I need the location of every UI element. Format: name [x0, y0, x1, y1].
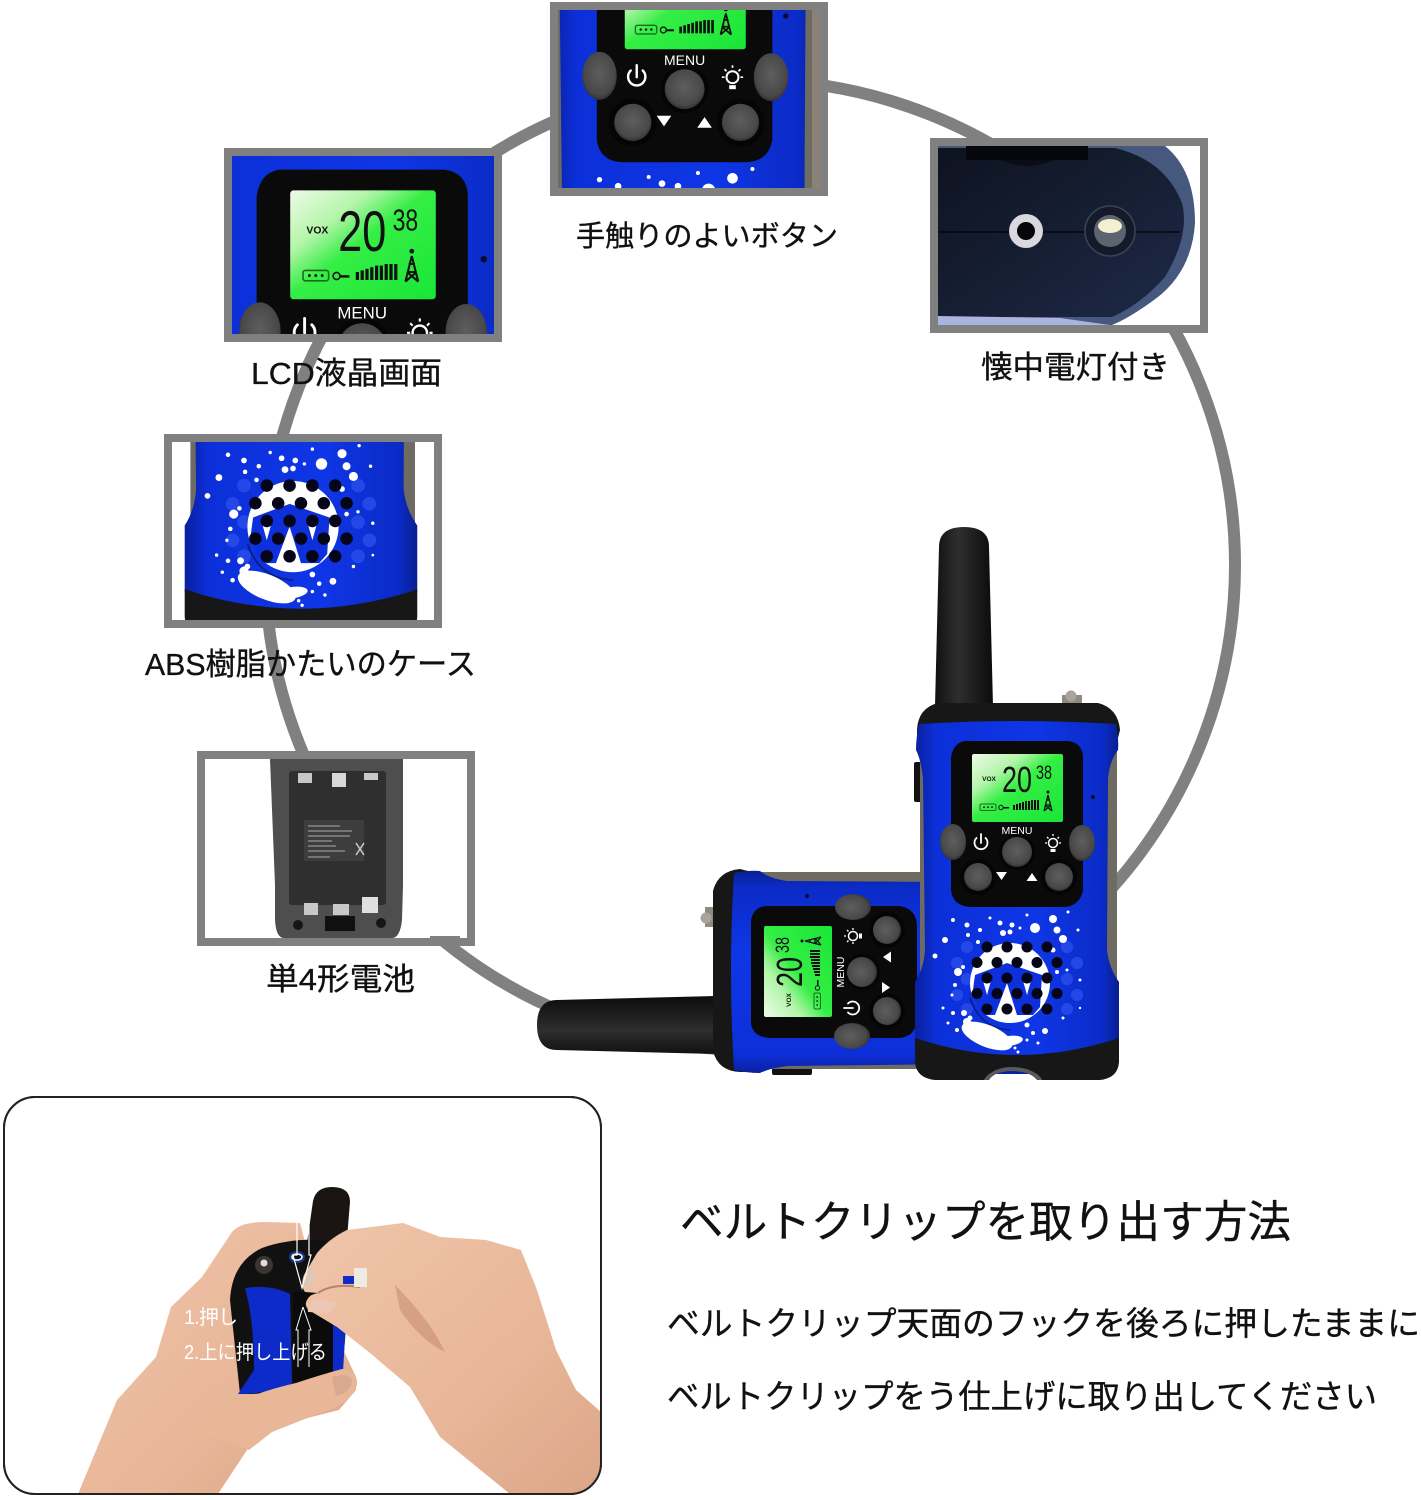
icon: walkie antenna	[308, 1187, 350, 1243]
icon: walkie held in hand	[230, 1240, 350, 1394]
connecting ring	[265, 80, 1235, 1050]
product photo: walkie lying on side: MENU	[835, 956, 847, 988]
product photo: walkie standing: MENU	[1002, 825, 1032, 837]
product photo: walkie lying on side	[537, 869, 1090, 1075]
label: flashlight: 懐中電灯付き	[981, 350, 1170, 385]
panel: LCD close-up	[224, 148, 502, 342]
panel: LCD close-up: MENU	[337, 303, 387, 322]
product photo: walkie standing: 20	[1002, 759, 1032, 800]
product photo: walkie lying on side: 20	[769, 957, 810, 987]
text block: instruction line 1: ベルトクリップ天面のフックを後ろに押したままに	[667, 1305, 1420, 1342]
icon: right hand	[302, 1223, 601, 1494]
product photo: walkie lying on side: 38	[773, 937, 794, 953]
panel: flashlight close-up	[934, 142, 1204, 329]
label: step 2: 2.上に押し上げる	[184, 1341, 327, 1364]
icon: push arrows	[293, 1220, 311, 1367]
product photo: walkie standing: 38	[1036, 763, 1052, 784]
panel: belt clip hand photo	[4, 1097, 601, 1494]
panel: buttons close-up: MENU	[664, 52, 705, 68]
panel: LCD close-up: 20	[338, 200, 386, 264]
product photo: walkie lying on side: VOX	[786, 992, 793, 1007]
label: ABS case: ABS樹脂かたいのケース	[145, 647, 476, 682]
label: step 1: 1.押し	[184, 1306, 238, 1329]
product photo: walkie standing: VOX	[982, 776, 997, 783]
product photo: walkie standing	[914, 527, 1120, 1080]
icon: left thumb	[248, 1369, 358, 1450]
icon: left hand	[78, 1222, 356, 1494]
panel: LCD close-up: 38	[393, 203, 418, 237]
panel: battery compartment close-up	[201, 755, 471, 942]
panel: ABS case close-up	[164, 434, 442, 628]
label: buttons: 手触りのよいボタン	[576, 220, 838, 253]
label: battery: 単4形電池	[266, 962, 415, 997]
text block: instruction line 2: ベルトクリップをう仕上げに取り出してください	[667, 1378, 1377, 1415]
label: LCD: LCD液晶画面	[251, 356, 442, 391]
panel: LCD close-up: VOX	[306, 226, 328, 237]
panel: buttons close-up	[550, 2, 828, 196]
heading: belt clip removal: ベルトクリップを取り出す方法	[680, 1198, 1291, 1247]
